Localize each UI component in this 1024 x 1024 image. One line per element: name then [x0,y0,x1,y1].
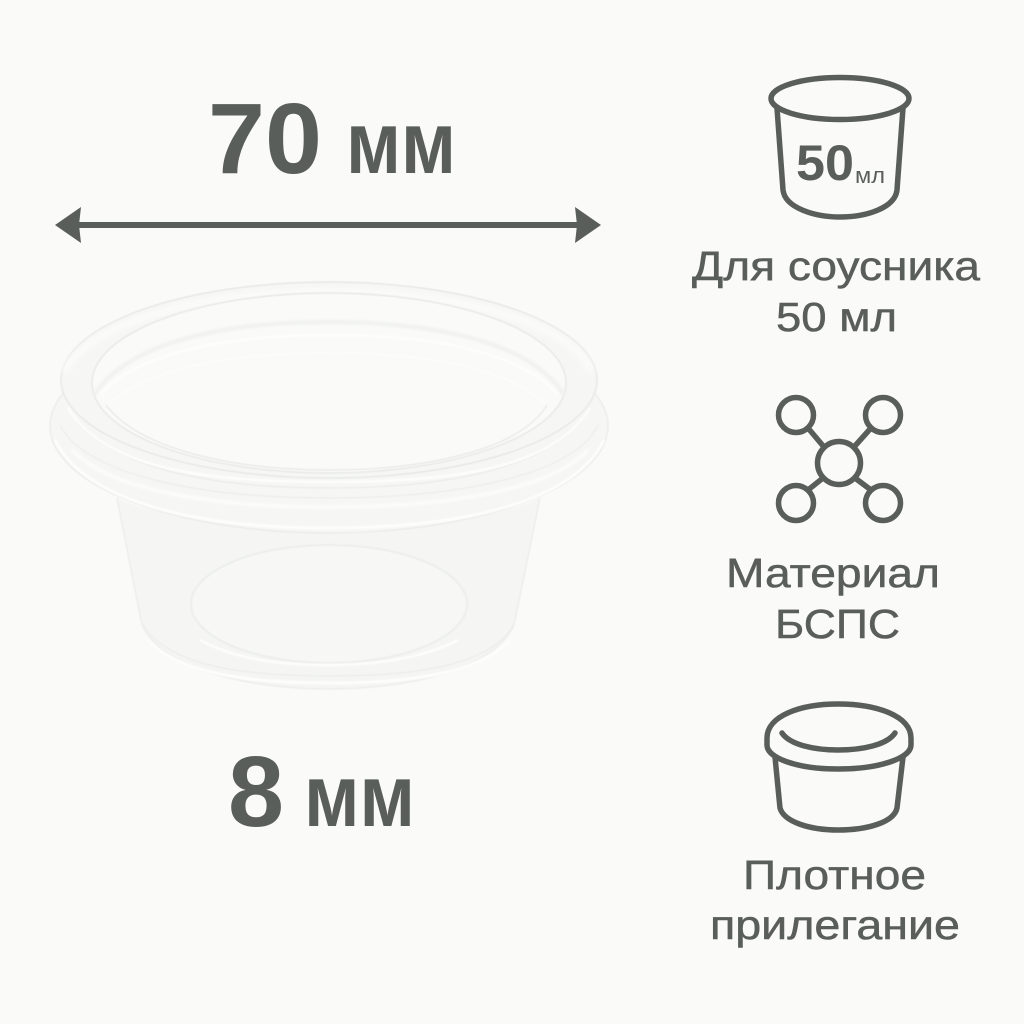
dimension title: 70 mm: мм [346,93,456,192]
dimension title: 70 mm [208,83,456,195]
caption: tight fit: Плотное [743,852,926,898]
icon: 50 ml cup [771,78,909,217]
caption: tight fit [710,852,960,948]
arrow: width dimension [55,207,601,243]
lid centre panel [94,322,564,470]
container base [191,545,467,665]
caption: for sauce cup 50 ml: Для соусника [692,243,980,289]
caption: for sauce cup 50 ml [692,243,980,340]
dimension title: 70 mm: 70 [208,83,322,195]
icon: material molecule [778,398,900,520]
caption: tight fit: прилегание [710,902,960,948]
caption: material BOPS [726,550,940,647]
icon: 50 ml cup: мл [855,163,885,188]
caption: material BOPS: БСПС [775,601,900,647]
dimension label: 8 mm: мм [304,746,415,845]
product photo: transparent container [50,282,608,689]
caption: for sauce cup 50 ml: 50 мл [776,294,897,340]
container body [117,498,540,689]
lid flange [50,319,608,533]
icon: 50 ml cup: 50 [796,135,854,191]
dimension label: 8 mm: 8 [228,736,284,848]
icon: tight-fitting lid [767,704,911,830]
lid rim [61,282,597,488]
dimension label: 8 mm [228,736,415,848]
caption: material BOPS: Материал [726,550,940,596]
